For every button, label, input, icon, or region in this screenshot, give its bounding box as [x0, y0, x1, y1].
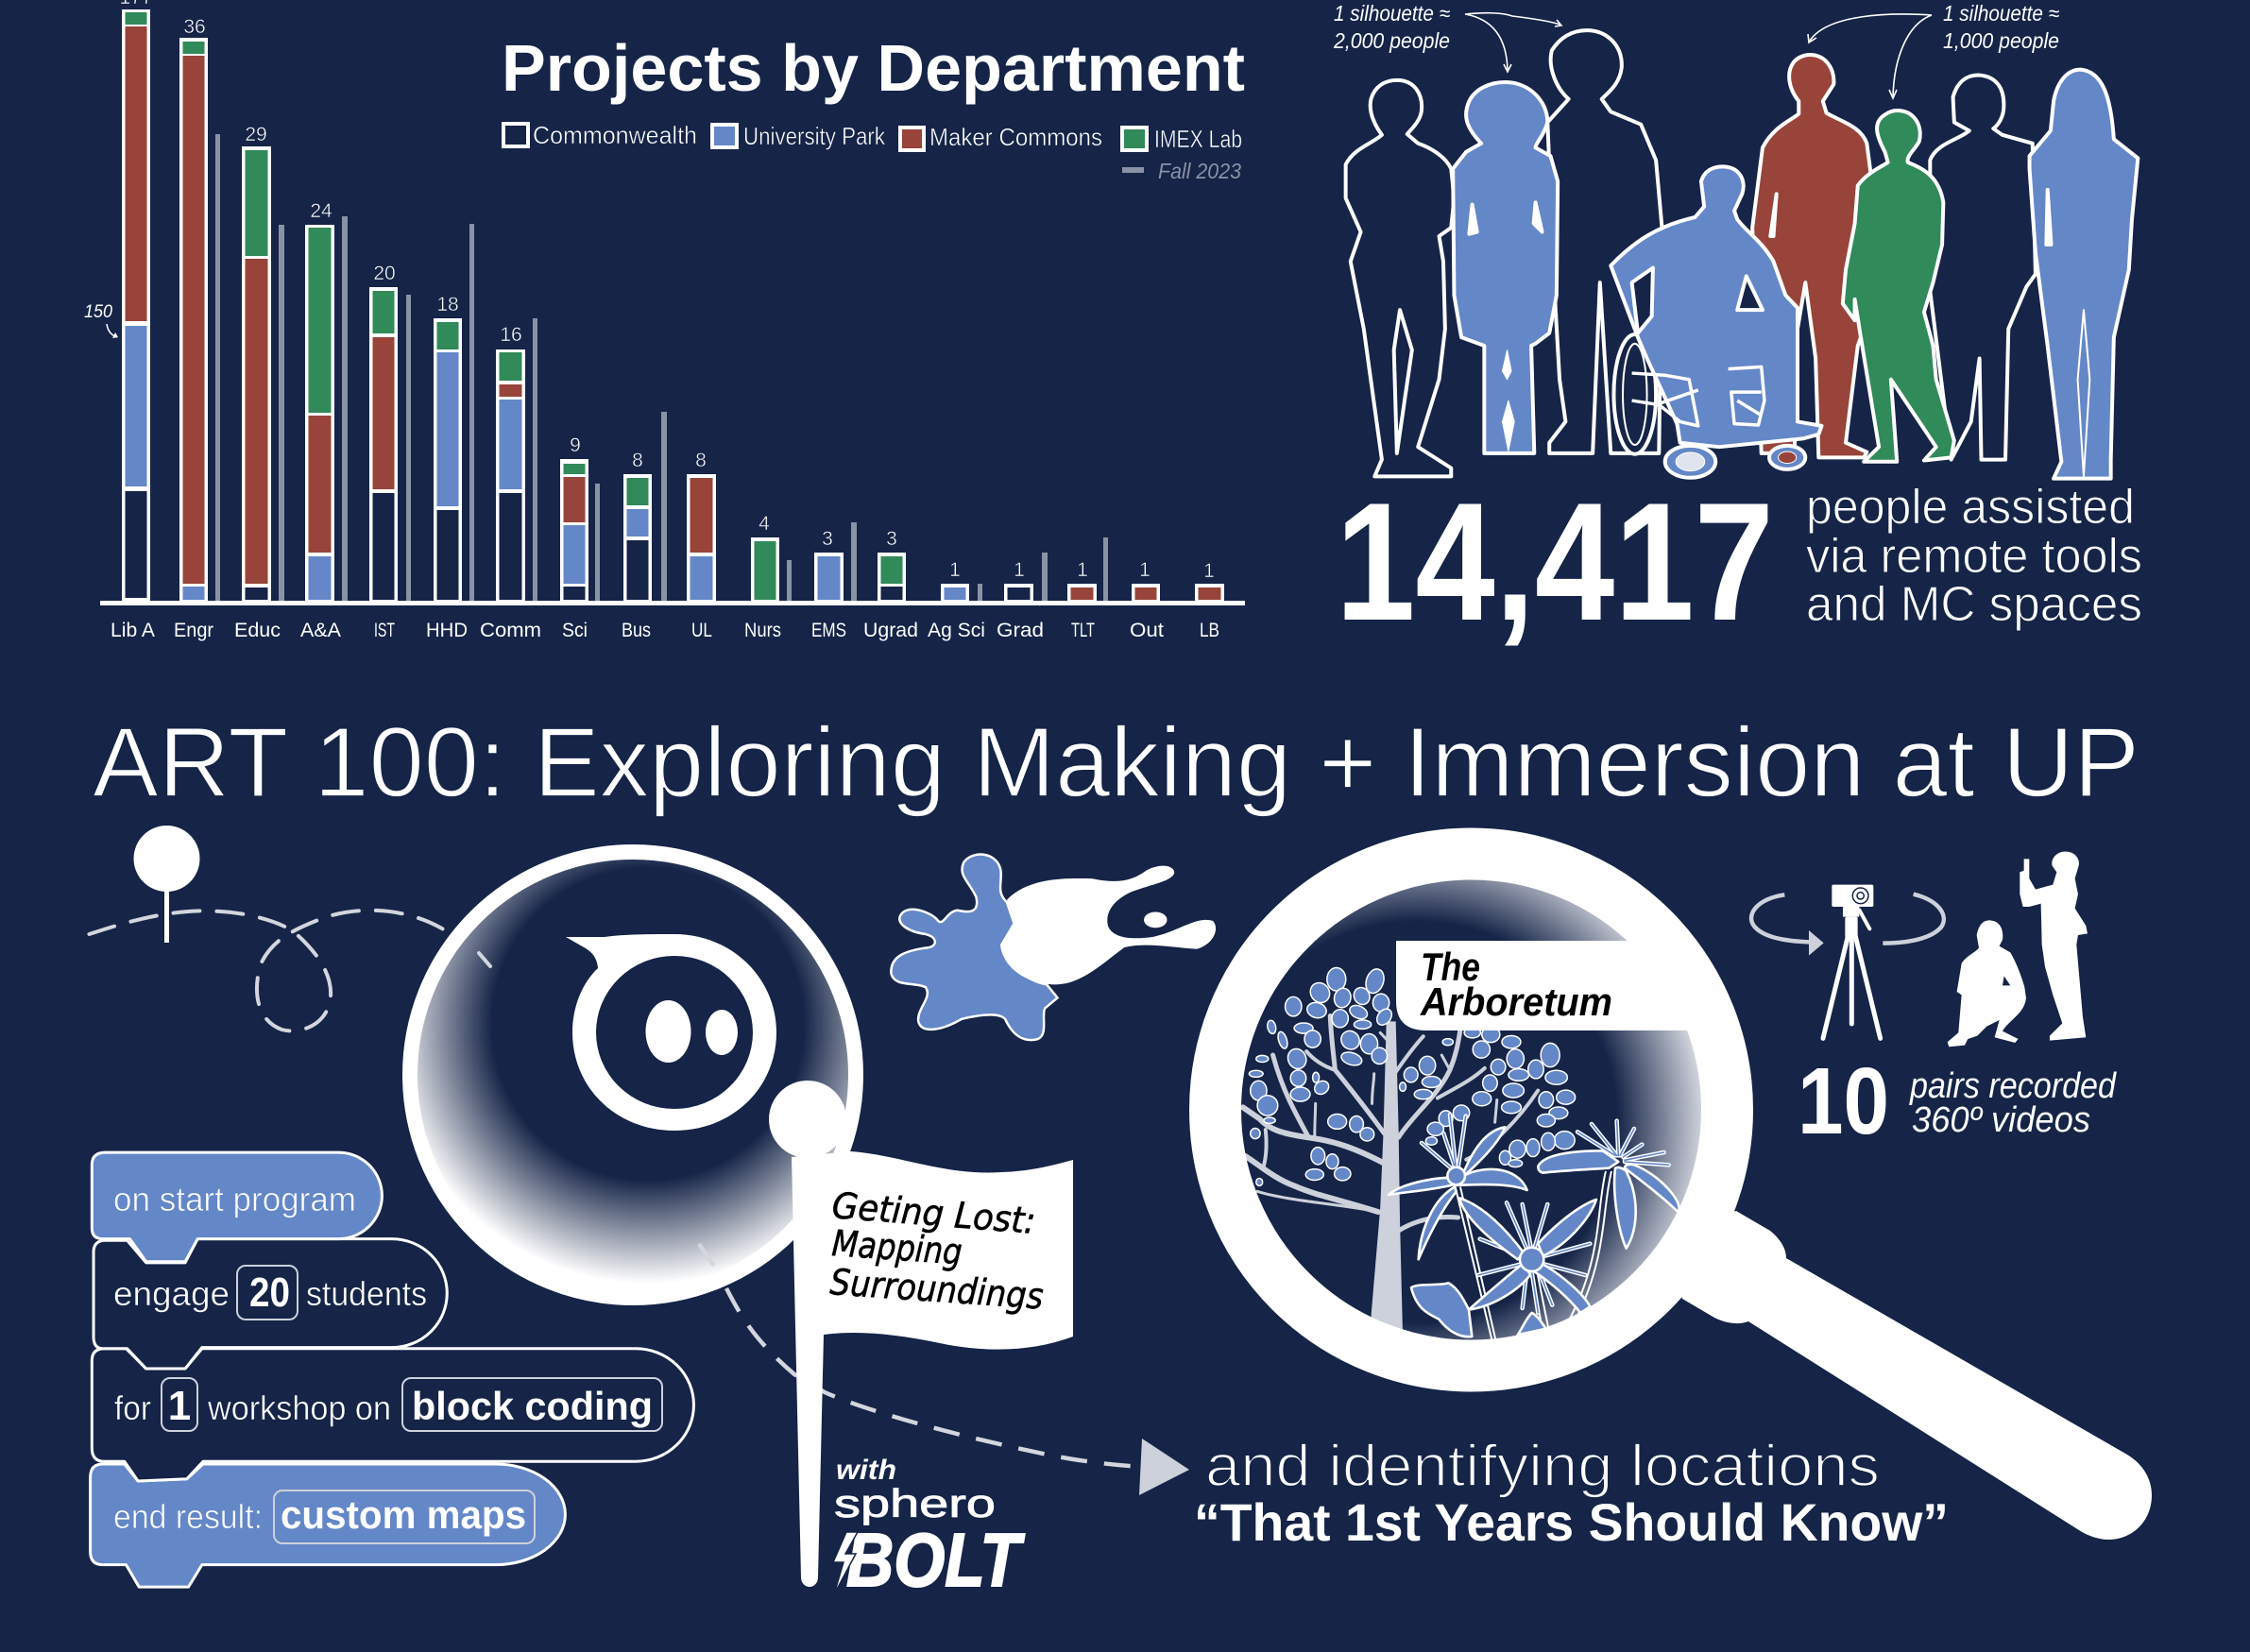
- sphero bolt logo: with: [836, 1455, 896, 1486]
- note: 1 silhouette = 2,000 people: [1333, 1, 1561, 72]
- flower spike centers: [1422, 1115, 1669, 1313]
- text: end result custom maps: custom maps: [281, 1492, 526, 1537]
- department labels: Lib A: [111, 620, 155, 641]
- flag text: Surroundings: [828, 1261, 1045, 1318]
- bar value labels: 3: [822, 528, 833, 550]
- bar: Bus: [623, 474, 652, 603]
- paint splat: [891, 855, 1216, 1040]
- bar value labels: 1: [1203, 560, 1215, 582]
- bar value labels: 36: [183, 16, 206, 38]
- department labels: EMS: [811, 620, 846, 641]
- bar: Comm: [496, 349, 525, 603]
- legend: IMEX Lab: IMEX Lab: [1154, 125, 1242, 153]
- note: 1 silhouette = 1,000 people: [1808, 1, 2059, 98]
- silhouette 8 outline: [1930, 75, 2036, 460]
- department labels: TLT: [1071, 620, 1095, 641]
- lens glass: [1241, 879, 1702, 1340]
- text: end result custom maps: [113, 1490, 535, 1543]
- lens: [410, 852, 856, 1298]
- bar: UL: [687, 474, 716, 603]
- bar: A&A: [305, 225, 334, 603]
- bar: Sci: [560, 459, 588, 603]
- splat droplet: [1144, 911, 1168, 928]
- note: 1 silhouette = 1,000 people: 1 silhouette ≈: [1943, 1, 2059, 26]
- block: end result: [91, 1464, 565, 1587]
- department labels: Bus: [622, 620, 651, 641]
- silhouette 6 red: [1752, 55, 1876, 457]
- flower stems: [1456, 1171, 1611, 1339]
- department labels: A&A: [300, 620, 341, 641]
- sphero bolt logo: [833, 1455, 1025, 1602]
- magnifier handle: [1662, 1211, 2152, 1540]
- bar: Lib A: [122, 9, 150, 603]
- note: 1 silhouette = 2,000 people: 2,000 people: [1333, 28, 1450, 53]
- scratch coding blocks: [91, 1152, 693, 1587]
- text: for 1 workshop on block coding: workshop on: [207, 1388, 391, 1427]
- block: engage 20 students: [94, 1239, 447, 1369]
- text: engage 20 students: 20: [249, 1269, 290, 1316]
- text: for 1 workshop on block coding: 1: [168, 1383, 191, 1429]
- bar value labels: 1: [949, 559, 961, 581]
- bar: Engr: [179, 38, 208, 603]
- silhouette 3 outline: [1547, 30, 1662, 453]
- dash inside lens: [479, 953, 490, 966]
- sphero bolt logo: BOLT: [846, 1518, 1025, 1602]
- bar value labels: 18: [436, 294, 459, 315]
- stat caption: people assisted: people assisted: [1806, 480, 2135, 535]
- silhouette: crouching student: [1948, 920, 2026, 1047]
- silhouette 4 wheelchair user: [1611, 166, 1822, 478]
- chart title: Projects by Department: [502, 31, 1245, 105]
- bar value labels: 8: [695, 450, 707, 471]
- block: for 1 workshop: [92, 1349, 693, 1481]
- bar: Educ: [242, 146, 271, 603]
- bar value labels: 20: [373, 263, 396, 284]
- location label: The: [1421, 945, 1480, 989]
- 360 video icons: [1751, 852, 2088, 1047]
- lens ring: [1215, 854, 1727, 1366]
- text: engage 20 students: [113, 1266, 427, 1320]
- bar: EMS: [814, 553, 844, 603]
- text: identifying locations: and identifying locations: [1205, 1434, 1880, 1499]
- arrowhead: [1139, 1439, 1189, 1495]
- stat caption: people assisted: [1806, 480, 2142, 632]
- department labels: Educ: [234, 620, 281, 641]
- legend: Fall 2023: [1122, 159, 1241, 183]
- legend: IMEX Lab: [1122, 125, 1242, 153]
- rotation arrow: [1751, 894, 1944, 956]
- icon: lightning: [833, 1532, 858, 1594]
- legend: Fall 2023: Fall 2023: [1158, 159, 1241, 183]
- bar value labels: 8: [632, 450, 643, 471]
- block: on start program: [92, 1152, 382, 1262]
- silhouette 9 blue: [2030, 70, 2138, 479]
- silhouettes: people assisted: [1346, 30, 2138, 479]
- bar: HHD: [434, 318, 462, 603]
- text: engage 20 students: engage: [113, 1274, 230, 1313]
- department labels: HHD: [426, 620, 468, 641]
- stat caption: pairs recorded: 360º videos: [1912, 1100, 2090, 1140]
- department labels: Sci: [562, 620, 588, 641]
- bar: TLT: [1067, 584, 1097, 603]
- bar chart: projects by department: [84, 0, 1245, 641]
- flowers: [1389, 1115, 1679, 1339]
- tree branches: [1243, 1015, 1538, 1231]
- dashed route to arboretum: [699, 1244, 1189, 1495]
- arboretum illustration: [1243, 967, 1679, 1339]
- stat caption: people assisted: via remote tools: [1806, 529, 2142, 584]
- bar value labels: 1: [1014, 559, 1025, 581]
- department labels: Out: [1130, 620, 1164, 641]
- text: for 1 workshop on block coding: for: [114, 1388, 151, 1427]
- stat caption: pairs recorded: pairs recorded: [1909, 1066, 2118, 1106]
- bar: LB: [1195, 584, 1224, 603]
- bar: Nurs: [751, 537, 779, 603]
- department labels: Ugrad: [863, 620, 918, 641]
- department labels: UL: [691, 620, 712, 641]
- tree leaves: [1249, 967, 1576, 1185]
- department labels: [111, 620, 1219, 641]
- silhouette 2 blue: [1453, 82, 1558, 453]
- bar value labels: 16: [500, 324, 522, 346]
- text: on start program: on start program: [113, 1180, 356, 1218]
- location label: Arboretum: [1420, 979, 1612, 1024]
- section title: ART 100: Exploring Making + Immersion at UP: [93, 707, 2139, 818]
- magnifier: arboretum: [1215, 854, 2152, 1540]
- legend: Maker Commons: Maker Commons: [929, 123, 1102, 151]
- splat white: [1000, 866, 1216, 984]
- chart baseline: [100, 601, 1245, 605]
- arrows to 1,000 silhouettes: [1808, 14, 1932, 98]
- bar value labels: 1: [1077, 559, 1088, 581]
- bar value labels: 24: [310, 200, 332, 222]
- stat: 10 pairs: 10: [1798, 1048, 1889, 1154]
- flower spikes: [1422, 1115, 1669, 1313]
- department labels: Engr: [174, 620, 213, 641]
- bar: IST: [369, 287, 398, 603]
- stat: 14,417: 14,417: [1336, 468, 1774, 656]
- bar value labels: 3: [886, 528, 897, 550]
- flower petals: [1389, 1127, 1679, 1337]
- department labels: LB: [1200, 620, 1219, 641]
- text: end result custom maps: end result:: [113, 1497, 263, 1536]
- stat caption: people assisted: and MC spaces: [1806, 577, 2142, 632]
- silhouette: standing student with phone: [2020, 852, 2088, 1041]
- bar value labels: 1: [1139, 559, 1151, 581]
- fall 2023 comparison bars: [215, 134, 1108, 601]
- note: 1 silhouette = 2,000 people: 1 silhouette ≈: [1334, 1, 1450, 26]
- dashed wandering path: [89, 911, 447, 1030]
- department labels: IST: [374, 620, 395, 641]
- tree trunk: [1372, 1021, 1403, 1336]
- bar: Ugrad: [878, 553, 906, 603]
- text: for 1 workshop on block coding: [114, 1378, 662, 1431]
- text: identifying locations: “That 1st Years Should Know”: [1194, 1492, 1949, 1552]
- map pin: [134, 826, 200, 943]
- axis break annotation: [84, 302, 118, 338]
- legend: Commonwealth: Commonwealth: [533, 121, 697, 149]
- department labels: Nurs: [744, 620, 781, 641]
- silhouette 1 outline: [1346, 80, 1454, 476]
- silhouette 7 green: [1843, 111, 1954, 462]
- sphero bolt logo: sphero: [834, 1481, 996, 1525]
- splat blue: [891, 855, 1058, 1040]
- text: engage 20 students: students: [306, 1274, 427, 1313]
- stat caption: pairs recorded: [1909, 1066, 2118, 1140]
- location label: [1396, 941, 1691, 1030]
- icon: camera on tripod: [1823, 885, 1881, 1038]
- flag: Getting Lost: [769, 1081, 1073, 1587]
- department labels: Comm: [480, 620, 541, 641]
- bar: Out: [1132, 584, 1160, 603]
- bar value labels: 29: [245, 124, 267, 145]
- department labels: Grad: [997, 620, 1044, 641]
- text: identifying locations: [1194, 1434, 1949, 1552]
- flag text: Geting Lost:: [830, 1184, 1037, 1242]
- map pin and dashed path: [89, 826, 447, 1030]
- bar: Ag Sci: [941, 584, 969, 603]
- note: 1 silhouette = 1,000 people: 1,000 people: [1943, 28, 2059, 53]
- chart legend: [503, 121, 1242, 183]
- legend: University Park: University Park: [743, 122, 886, 150]
- magnifier: Sphero ball: [410, 852, 856, 1298]
- axis break annotation: 150: [84, 302, 112, 322]
- flag text: Mapping: [830, 1222, 963, 1273]
- bar value labels: 9: [570, 434, 581, 456]
- arrows to 2,000 silhouettes: [1465, 13, 1561, 72]
- department labels: Ag Sci: [928, 620, 985, 641]
- bar value labels: [119, 0, 1215, 582]
- bar value labels: 4: [759, 513, 770, 535]
- flag shape and pole: [769, 1081, 1073, 1587]
- text: for 1 workshop on block coding: block coding: [412, 1384, 653, 1428]
- bar: Grad: [1004, 584, 1033, 603]
- icon: sphero logo: [566, 934, 776, 1131]
- flag text: [828, 1184, 1045, 1318]
